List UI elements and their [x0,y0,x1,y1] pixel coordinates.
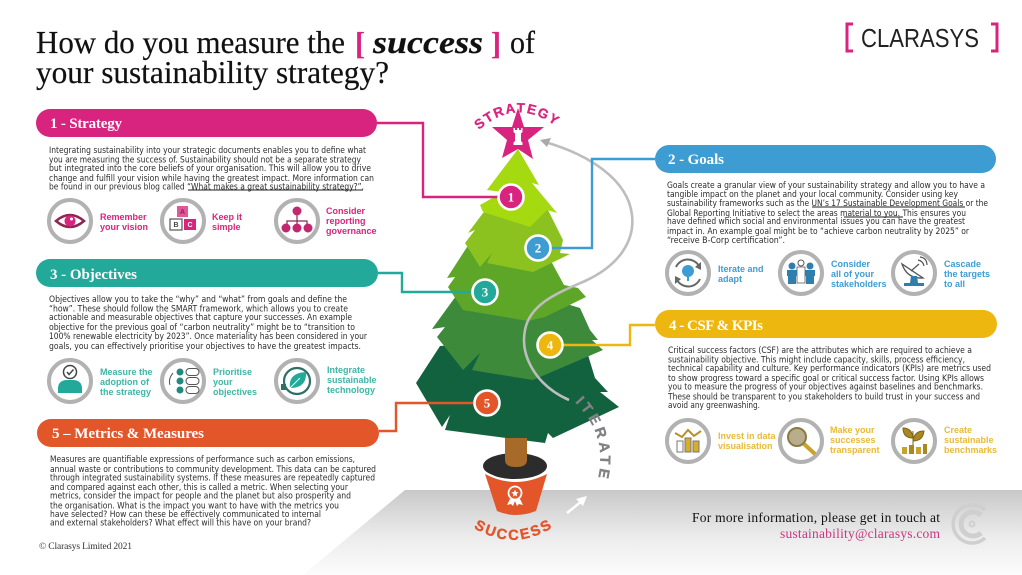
marker 1: 1 [508,190,514,204]
trunk [505,438,527,467]
label: adapt [718,274,742,284]
label: the strategy [100,387,151,397]
arrow: success to iterate [567,496,587,513]
label: transparent [830,445,880,455]
contact text: For more information, please get in touch at [692,510,940,525]
heading bar [36,109,377,137]
heading bar [655,310,997,338]
marker 2 [526,236,550,260]
body text: impact in. An example goal might be to “achieve carbon neutrality by 2025” or [667,227,969,237]
title: How do you measure the [36,24,345,60]
body text: annual waste or contributions to community development. This data can be captured [50,465,376,475]
label: Iterate and [718,264,764,274]
label: Make your [830,425,875,435]
title: your sustainability strategy? [36,54,389,90]
copyright: © Clarasys Limited 2021 [39,541,132,552]
body text: have selected? How can these be effectively communicated to internal [50,510,321,520]
body text: metrics, consider the impact for people and the planet but also prosperity and [50,492,351,502]
body text: but integrated into the core beliefs of your organisation. This will allow you to drive [49,164,371,174]
label: your [213,377,233,387]
label: sustainable [944,435,994,445]
icon: leaf plug [276,360,318,402]
label: Measure the [100,367,153,377]
body text: 100% renewable electricity by 2023”. Once materiality has been considered in your [49,332,367,342]
marker 5 [474,390,500,416]
label: SUCCESS arc: SUCCESS [474,520,551,540]
body text: objective for the previous goal of “carbon neutrality” might be to “transition to [49,323,355,333]
icon: priority list [162,360,204,402]
body text: and compared against each other, this is called a metric. When selecting your [50,483,348,493]
marker 3: 3 [482,284,489,300]
icon: hierarchy [276,200,318,242]
heading bar: 4 - CSF & KPIs [669,318,763,334]
label: Cascade [944,259,981,269]
label: governance [326,226,377,236]
label: successes [830,435,876,445]
marker 2: 2 [535,240,541,256]
label: benchmarks [944,445,997,455]
logo mark [953,505,985,543]
body text: have defined which social and environmental issues you can have the greatest [667,217,965,227]
title: success [372,24,483,60]
floor [303,490,1022,575]
heading bar: 1 - Strategy [50,116,122,132]
icon: stakeholders [780,252,822,294]
body text: actionable and measurable objectives that capture your successes. An example [49,313,352,323]
body text: sustainability objective. This might include capacity, skills, process efficiency, [668,356,965,366]
icon: person with check [49,360,91,402]
label: adoption of [100,377,150,387]
label: Consider [326,206,366,216]
label: ITERATE arc: ITERATE [576,396,611,479]
heading bar: 2 - Goals [668,152,724,168]
body text: be found in our previous blog called “What makes a great sustainability strategy?”. [49,182,364,192]
panel: 2 Goals [655,145,996,294]
icon: magnifying glass [780,420,822,462]
callout 4 connector [555,325,655,345]
title: of [510,24,535,60]
panel: 4 CSF and KPIs [655,310,997,462]
label: Prioritise [213,367,252,377]
body text: avoid any greenwashing. [668,401,760,411]
body text: Measures are quantifiable expressions of performance such as carbon emissions, [50,455,355,465]
label: stakeholders [831,279,887,289]
heading bar: 5 – Metrics & Measures [52,426,204,442]
label: objectives [213,387,257,397]
panel: 1 Strategy [36,109,377,242]
label: reporting [326,216,366,226]
heading bar [36,259,378,287]
icon: blocks [162,200,204,242]
marker 4: 4 [547,338,554,352]
tree [416,149,619,467]
arrow: iterate loop [524,138,632,400]
body text [667,346,991,411]
label: visualisation [718,441,773,451]
panel: 5 Metrics and Measures [37,419,379,528]
icon: blocks: B [173,222,179,229]
heading bar [37,419,379,447]
body text: “how”. These should follow the SMART framework, which allows you to create [49,304,348,314]
icon: blocks: A [180,209,185,216]
heading bar: 3 - Objectives [50,267,137,283]
marker 3 [472,280,498,304]
logo: Clarasys: CLARASYS [861,23,979,53]
title [36,24,535,90]
label: Create [944,425,972,435]
label: STRATEGY arc: STRATEGY [474,102,560,129]
label: the targets [944,269,990,279]
callout 3 connector [378,273,480,292]
body text: through integrated sustainability systems. If these measures are repeatedly captured [50,474,375,484]
body text: Objectives allow you to take the “why” and “what” from goals and define the [49,295,347,305]
body text: “receive B-Corp certification”. [667,236,785,246]
label: sustainable [327,375,377,385]
body text: Critical success factors (CSF) are the attributes which are required to achieve a [668,346,972,356]
body text: to show progress toward a specific goal or critical success factor. Using KPIs allows [668,374,984,384]
body text: goals, you can effectively prioritise your objectives to have the greatest impacts. [49,342,361,352]
icon: iterate cycle [667,252,709,294]
callout 2 connector [545,159,655,248]
body text [49,146,374,192]
body text [667,181,988,246]
callout 1 connector [377,123,505,197]
heading bar [655,145,996,173]
body text: change and fulfill your vision while having the greatest impact. More information can [49,174,374,184]
marker 1 [498,184,524,210]
body text: Integrating sustainability into your strategic documents enables you to define what [49,146,366,156]
label: Invest in data [718,431,777,441]
title: ] [491,25,501,61]
label: Consider [831,259,871,269]
label: all of your [831,269,875,279]
plant pot [483,440,549,515]
body text: you are measuring the success of. Sustainability should not be a separate strategy [49,156,361,166]
icon: eye [49,200,91,242]
body text: and external stakeholders? What effect will this have on your brand? [50,518,311,528]
contact text [692,510,940,541]
icon: satellite dish [893,252,935,294]
label: Remember [100,212,147,222]
body text [49,295,367,352]
callout 5 connector [379,403,482,431]
body text: Global Reporting Initiative to select the areas material to you. This ensures you [667,209,966,219]
contact text: sustainability@clarasys.com [780,526,940,541]
label: your vision [100,222,148,232]
icon: plant benchmark [893,420,935,462]
marker 5: 5 [484,396,491,410]
body text: tangible impact on the planet and your local community. Consider using key [667,190,958,200]
label: Keep it [212,212,242,222]
panel: 3 Objectives [36,259,378,402]
label: technology [327,385,375,395]
body text [50,455,376,528]
label: simple [212,222,241,232]
label: to all [944,279,965,289]
body text: the organisation. What is the impact you want to have with the metrics you [50,502,339,512]
icon: blocks: C [187,222,193,229]
icon: data chart [667,420,709,462]
title: [ [355,25,365,61]
label: Integrate [327,365,365,375]
star: strategy [492,108,544,159]
marker 4 [538,332,562,358]
